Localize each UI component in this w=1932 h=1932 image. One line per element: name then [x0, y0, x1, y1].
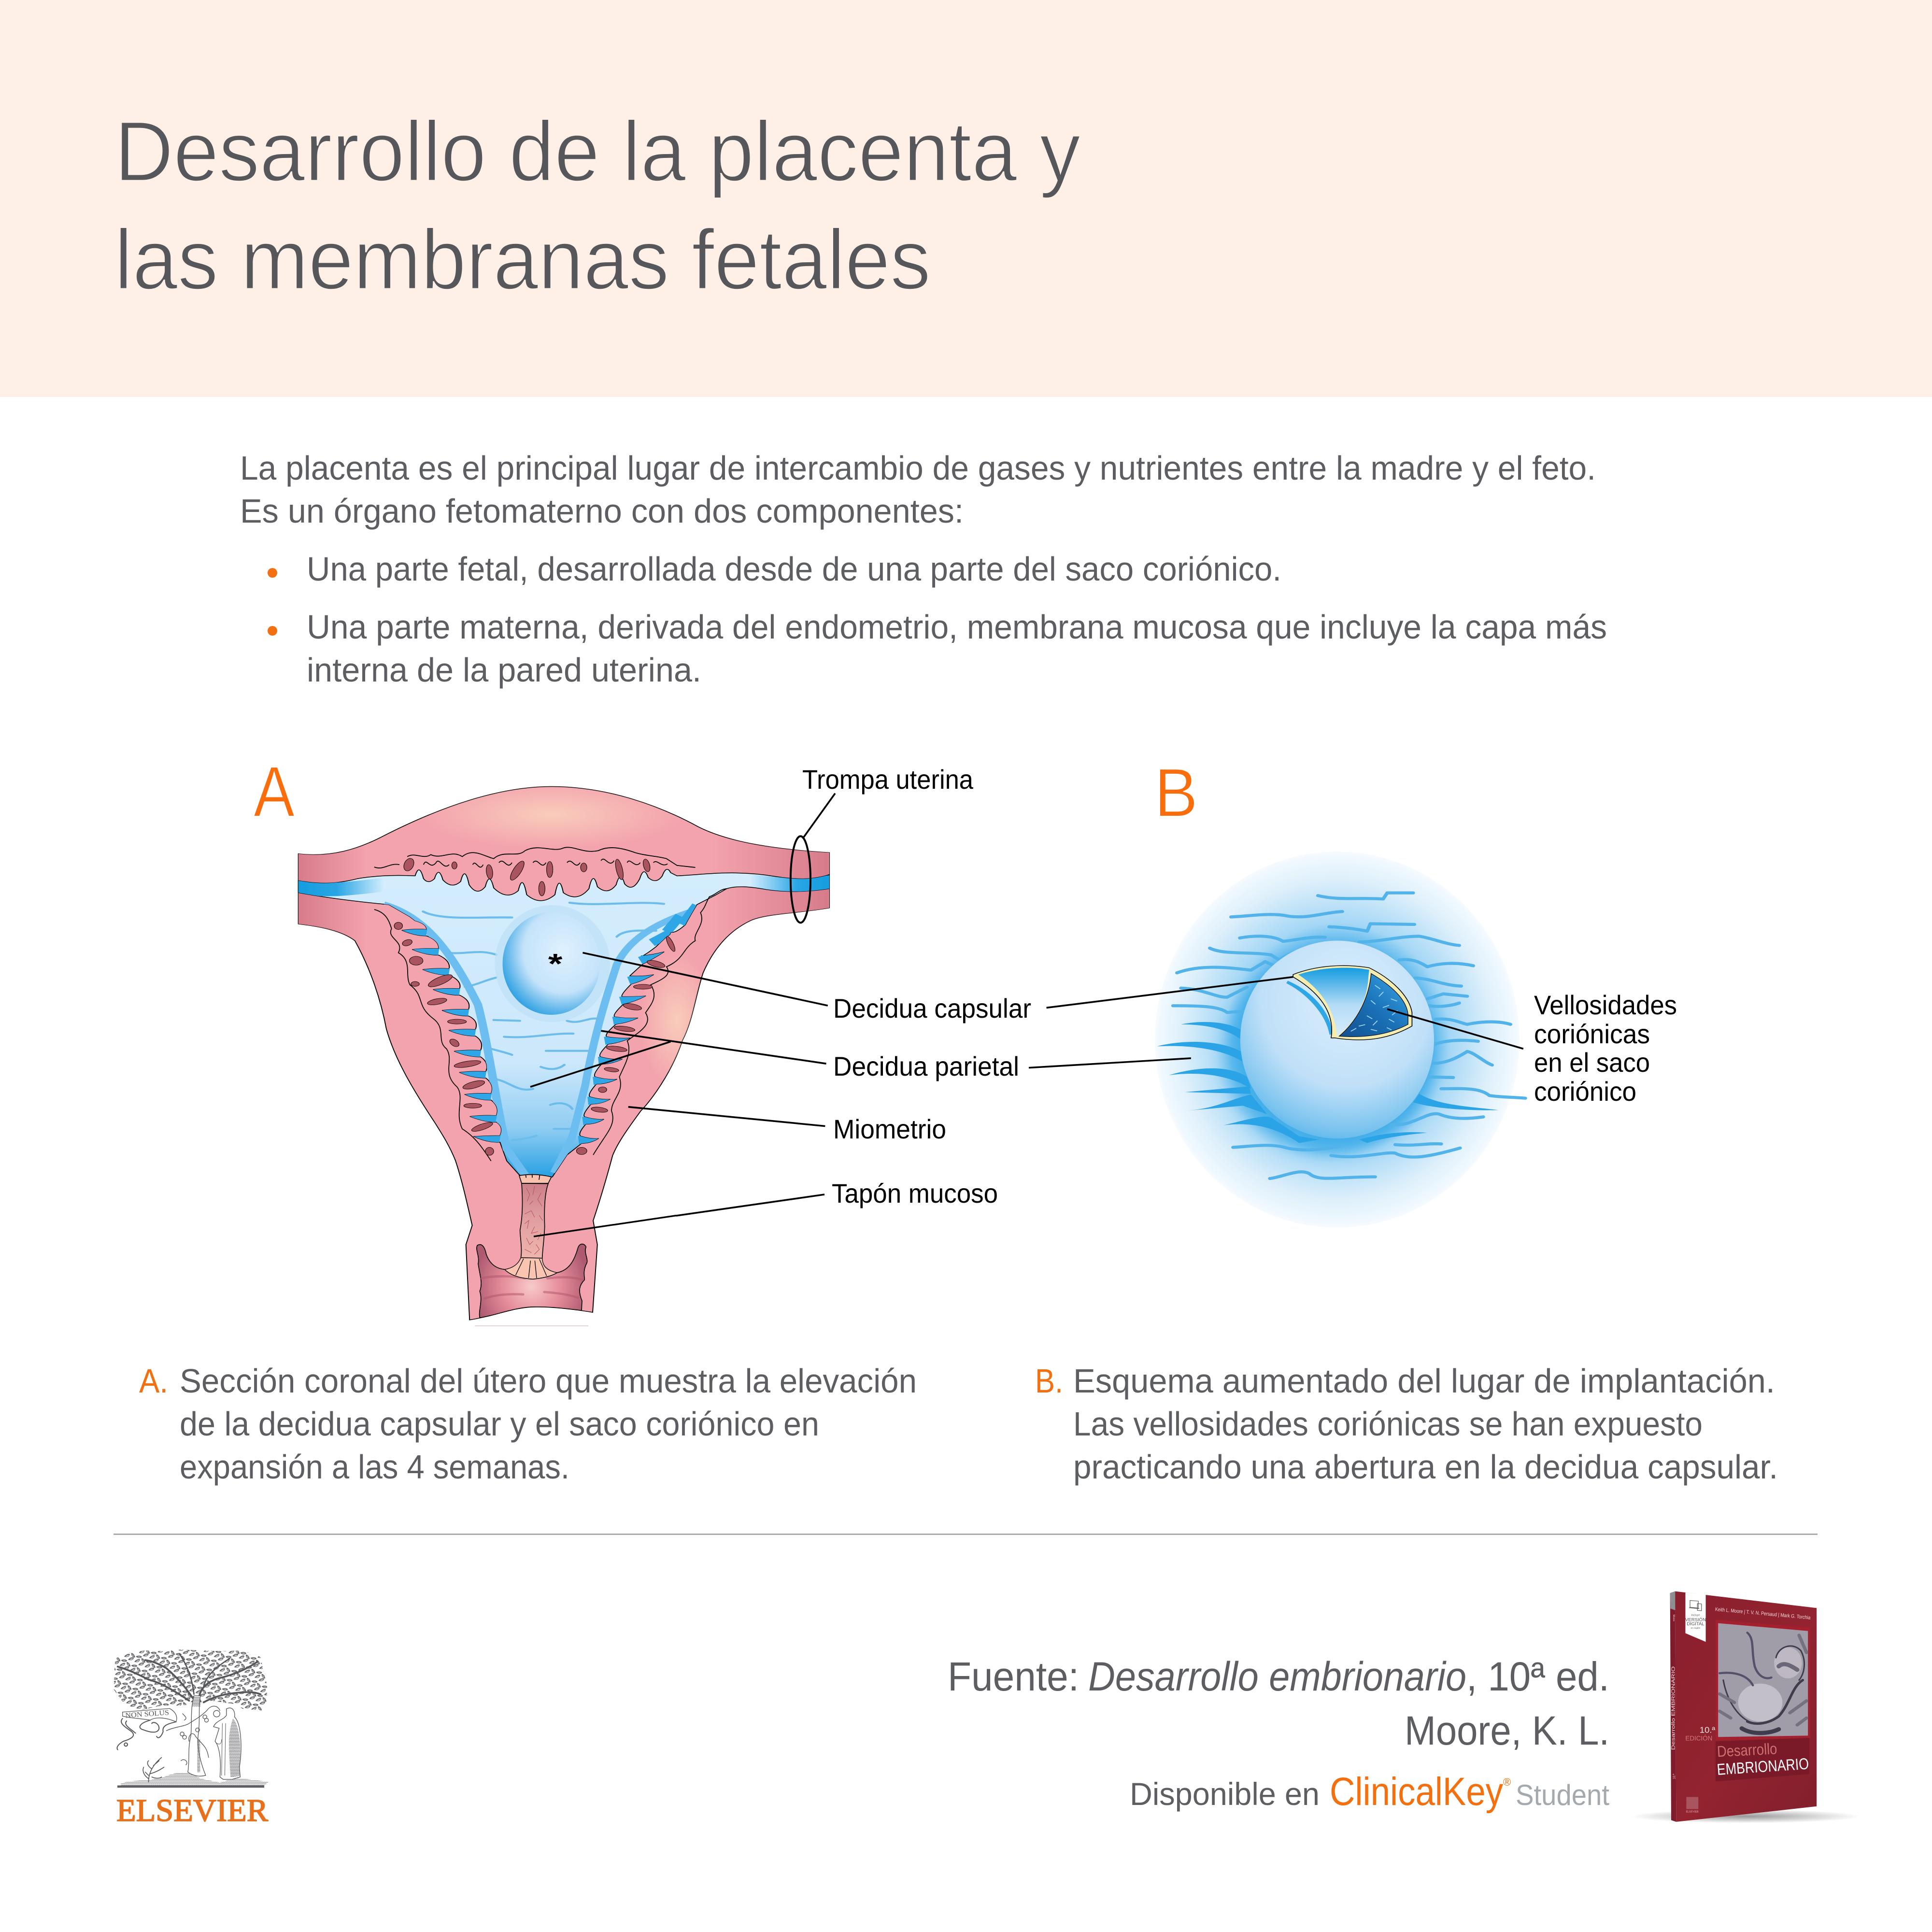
spine text: Moore: [1672, 1615, 1675, 1621]
plug leader line: [534, 1216, 676, 1236]
chorionic sac sphere: [1240, 941, 1434, 1138]
bullet list: Una parte materna, derivada del endometrio, membrana mucosa que incluye la capa más: [307, 608, 1607, 646]
caption B: B.: [1035, 1362, 1063, 1400]
uterus wall: [298, 786, 829, 1320]
chorionic villi exposed: [1339, 974, 1408, 1037]
tree canopy: [114, 1649, 267, 1710]
mucous plug: [520, 1183, 548, 1258]
caption B: Las vellosidades coriónicas se han expuesto: [1073, 1405, 1703, 1443]
spine: [1670, 1591, 1676, 1822]
uterine cavity: [298, 869, 829, 1178]
leader lines B: [1029, 977, 1523, 1068]
digital badge: DIGITAL: [1687, 1621, 1705, 1626]
spine text: [1671, 1615, 1676, 1779]
plug collar: [519, 1174, 552, 1183]
diagram B: implantation site: [1029, 852, 1525, 1228]
sage figure: [213, 1708, 241, 1779]
source citation: Desarrollo embrionario: [1088, 1654, 1466, 1699]
panel letter A: A: [254, 752, 295, 832]
book cover: [1631, 1591, 1860, 1823]
ground: [121, 1773, 269, 1786]
digital badge: VERSIÓN: [1685, 1618, 1706, 1622]
shrub: [143, 1758, 164, 1782]
leader line: tapon mucoso: [676, 1194, 824, 1216]
labels A: [802, 764, 1031, 1208]
tree branches: [118, 1654, 260, 1702]
labels A: Tapón mucoso: [832, 1178, 998, 1208]
ground line: [117, 1786, 264, 1788]
plug flare: [505, 1258, 557, 1279]
tube ring: [791, 836, 810, 923]
chorion halo: [1155, 852, 1520, 1228]
asterisk: *: [548, 949, 563, 980]
cover photo: [1718, 1623, 1808, 1737]
labels A: Decidua parietal: [833, 1051, 1019, 1081]
spine text: 10.ª: [1673, 1774, 1676, 1779]
trunk hatching: [192, 1697, 200, 1772]
title block: [1716, 1738, 1809, 1781]
caption A: Sección coronal del útero que muestra la elevación: [180, 1362, 917, 1400]
plug texture: [525, 1187, 542, 1254]
digital badge: [1685, 1592, 1706, 1642]
banner non solus: [117, 1708, 177, 1750]
intro text: Es un órgano fetomaterno con dos componentes:: [240, 492, 964, 530]
wall shading: [298, 786, 829, 1081]
edition: EDICIÓN: [1685, 1734, 1712, 1742]
book title: Desarrollo: [1717, 1740, 1777, 1761]
caption B: Esquema aumentado del lugar de implantación.: [1073, 1362, 1775, 1400]
tree trunk: [188, 1696, 206, 1776]
availability line: Disponible en: [1130, 1776, 1320, 1812]
edition: [1685, 1725, 1716, 1742]
vaginal lumen: [477, 1244, 587, 1318]
caption B: [1035, 1362, 1778, 1486]
cavity blue edges: [295, 881, 834, 1175]
cavity villi strokes: [423, 903, 664, 1140]
bullet list: interna de la pared uterina.: [307, 651, 701, 689]
vaginal rugae: [482, 1276, 583, 1298]
header band: [0, 0, 1932, 397]
labels B: coriónico: [1534, 1076, 1636, 1107]
panel letter B: B: [1154, 754, 1198, 831]
caption A: A.: [139, 1362, 168, 1400]
cover logo: [1686, 1797, 1699, 1814]
availability line: [1130, 1770, 1609, 1814]
bullet list: [268, 550, 1607, 689]
labels B: coriónicas: [1534, 1019, 1650, 1049]
book shadow: [1631, 1809, 1860, 1823]
Elsevier logo: [114, 1649, 269, 1828]
book title: [1716, 1740, 1809, 1779]
labels B: Vellosidades: [1534, 990, 1677, 1020]
window shadow: [1287, 982, 1331, 1035]
villi flecks: [1351, 985, 1397, 1031]
book title: EMBRIONARIO: [1716, 1755, 1809, 1779]
banner non solus: NON SOLUS: [125, 1709, 170, 1719]
bullet list: Una parte fetal, desarrollada desde de una parte del saco coriónico.: [307, 550, 1281, 588]
villi: [1157, 893, 1525, 1179]
glands top: [374, 847, 696, 896]
spine top: [1670, 1591, 1675, 1610]
caption A: [139, 1362, 917, 1486]
digital badge: en inglés: [1691, 1627, 1701, 1630]
title: las membranas fetales: [114, 213, 931, 307]
caption A: expansión a las 4 semanas.: [180, 1448, 569, 1486]
lower trace line: [475, 1325, 588, 1327]
availability line: ClinicalKey: [1330, 1770, 1503, 1814]
labels B: en el saco: [1534, 1047, 1650, 1078]
labels B: [1534, 990, 1677, 1107]
inner opening: [1298, 968, 1369, 1036]
caption A: de la decidua capsular y el saco coriónico en: [180, 1405, 819, 1443]
sac underglow: [1224, 955, 1434, 1155]
labels A: Trompa uterina: [802, 764, 974, 795]
cover logo: ELSEVIER: [1686, 1810, 1699, 1814]
title: Desarrollo de la placenta y: [114, 104, 1080, 199]
authors: Keith L. Moore | T. V. N. Persaud | Mark G. Torchia: [1715, 1606, 1811, 1621]
source citation: Moore, K. L.: [1405, 1708, 1609, 1753]
vine and grapes: [166, 1706, 220, 1765]
embryo image: [1719, 1633, 1806, 1733]
cut-out window: [1293, 966, 1412, 1040]
spine text: Desarrollo EMBRIONARIO: [1671, 1666, 1676, 1750]
digital badge: Incluye: [1691, 1614, 1700, 1617]
labels A: Miometrio: [833, 1114, 946, 1144]
source citation: , 10ª ed.: [1466, 1654, 1609, 1699]
title: [114, 104, 1080, 307]
intro text: La placenta es el principal lugar de intercambio de gases y nutrientes entre la madre y el feto.: [240, 449, 1596, 487]
leader lines A: [530, 794, 835, 1126]
glands right wall: [576, 889, 727, 1155]
decidua capsular halo: [495, 905, 610, 1022]
source citation: [948, 1654, 1609, 1753]
source citation: Fuente:: [948, 1654, 1079, 1699]
cover photo frame: [1716, 1620, 1810, 1740]
labels A: Decidua capsular: [833, 993, 1031, 1023]
cover face: [1675, 1591, 1817, 1822]
cervix and mucous plug: [475, 1174, 676, 1326]
edition: 10.ª: [1700, 1725, 1716, 1734]
availability line: ®: [1503, 1776, 1511, 1788]
chorionic sac: [503, 912, 600, 1015]
glands left wall: [374, 909, 494, 1161]
caption B: practicando una abertura en la decidua capsular.: [1073, 1448, 1778, 1486]
intro text: [240, 449, 1596, 530]
diagram A: uterus coronal section: [295, 781, 835, 1321]
wordmark: ELSEVIER: [116, 1793, 268, 1828]
availability line: Student: [1516, 1779, 1609, 1811]
